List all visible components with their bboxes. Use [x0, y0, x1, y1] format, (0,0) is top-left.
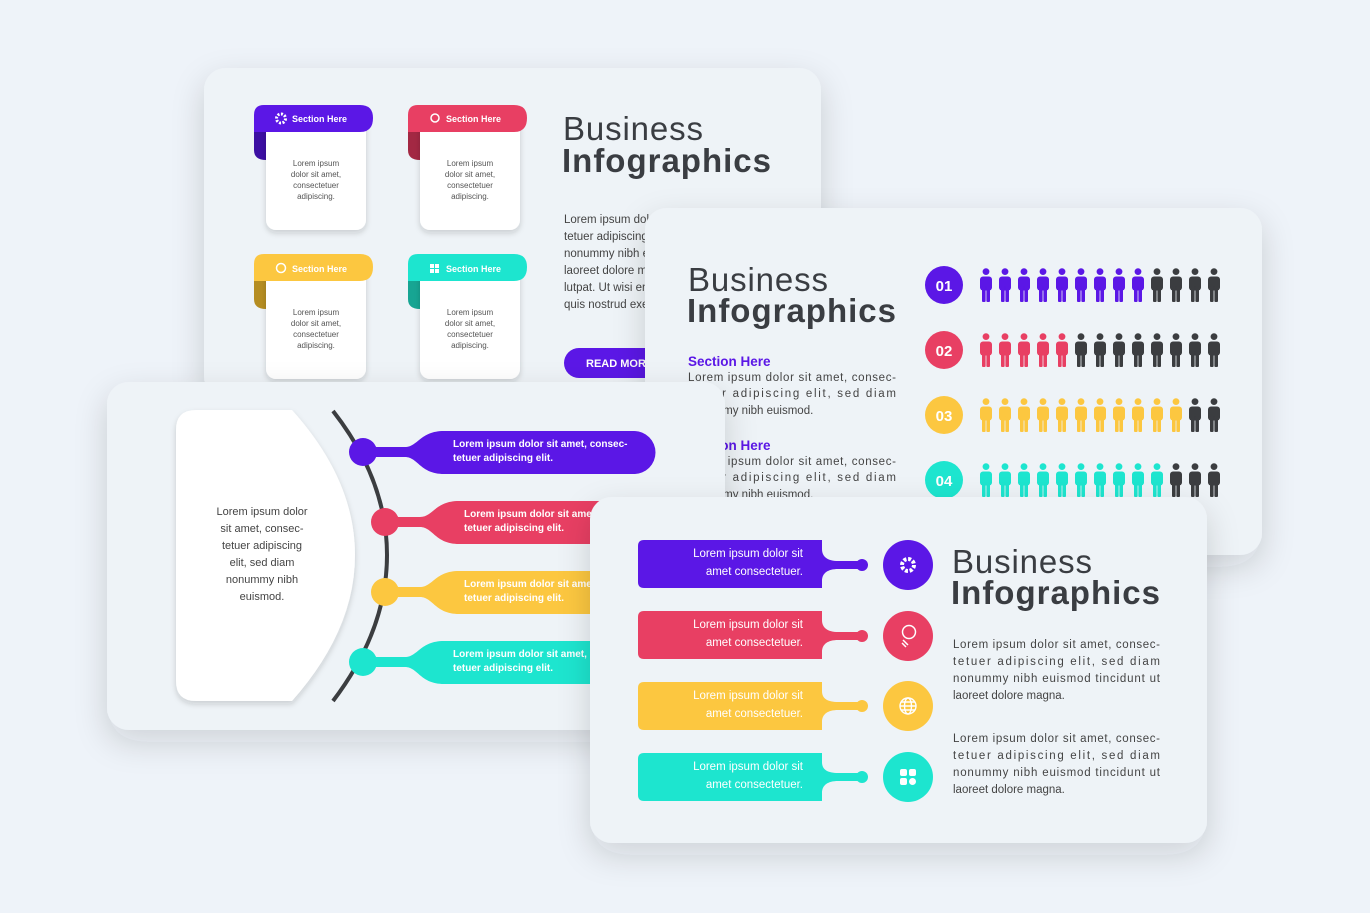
- body text A: nonummy nibh euismod tincidunt ut: [564, 248, 746, 260]
- section text 2: tetuer adipiscing elit, sed diam: [688, 472, 896, 484]
- bar: purple: Lorem ipsum dolor sit: [693, 548, 804, 560]
- row 01: [925, 266, 1220, 304]
- item: teal: [349, 641, 660, 684]
- white arc text block: nonummy nibh: [226, 574, 298, 586]
- row 04: 04: [936, 473, 953, 490]
- white arc text block: Lorem ipsum dolor: [216, 506, 308, 518]
- row 03: 03: [936, 408, 952, 425]
- bar: yellow: [638, 682, 868, 730]
- icon: globe: [883, 681, 933, 731]
- bar: yellow: Lorem ipsum dolor sit: [693, 690, 804, 702]
- card: yellow section: Lorem ipsum: [293, 308, 339, 317]
- section text 1: [688, 354, 896, 417]
- card: yellow section: Section Here: [292, 264, 347, 274]
- white arc text block: elit, sed diam: [230, 557, 294, 569]
- card: red section: consectetuer: [447, 181, 493, 190]
- white arc text block: sit amet, consec-: [220, 523, 304, 535]
- row 02: 02: [936, 343, 952, 360]
- section text 2: nonummy nibh euismod.: [688, 489, 813, 501]
- section text 1: nonummy nibh euismod.: [688, 405, 813, 417]
- body text A: laoreet dolore magna aliquam erat vo-: [564, 265, 759, 277]
- item: purple: Lorem ipsum dolor sit amet, consec-: [453, 439, 627, 450]
- body text D: tetuer adipiscing elit, sed diam: [953, 656, 1160, 668]
- section text 1: Section Here: [688, 354, 771, 369]
- card: purple section: adipiscing.: [297, 192, 335, 201]
- body text A: lutpat. Ut wisi enim ad minim veniam,: [564, 282, 754, 294]
- body text D: Lorem ipsum dolor sit amet, consec-: [953, 639, 1160, 651]
- title D: Business: [952, 543, 1092, 580]
- card: yellow section: consectetuer: [293, 330, 339, 339]
- item: purple: tetuer adipiscing elit.: [453, 453, 553, 464]
- row 02: [925, 331, 1220, 369]
- card: red section: adipiscing.: [451, 192, 489, 201]
- card: teal section: [408, 254, 527, 379]
- section text 1: tetuer adipiscing elit, sed diam: [688, 388, 896, 400]
- body text A: Lorem ipsum dolor sit amet, consec-: [564, 214, 750, 226]
- section text 2: [688, 438, 896, 501]
- panel: icon list: [590, 497, 1207, 843]
- bar: red: amet consectetuer.: [706, 637, 803, 649]
- icon: gear: [883, 540, 933, 590]
- item: red: tetuer adipiscing elit.: [464, 523, 564, 534]
- icon: bulb: [883, 611, 933, 661]
- card: teal section: adipiscing.: [451, 341, 489, 350]
- bar: purple: [638, 540, 868, 588]
- panel: icon list: nonummy nibh euismod tincidunt ut: [953, 767, 1161, 779]
- panel: top-left section cards: [204, 68, 821, 398]
- white arc text block: tetuer adipiscing: [222, 540, 302, 552]
- icon: grid: [883, 752, 933, 802]
- bar: red: [638, 611, 868, 659]
- bar: yellow: amet consectetuer.: [706, 708, 803, 720]
- item: yellow: Lorem ipsum dolor sit amet,: [464, 579, 598, 590]
- body text D: laoreet dolore magna.: [953, 690, 1065, 702]
- card: teal section: dolor sit amet,: [445, 319, 495, 328]
- item: teal: tetuer adipiscing elit.: [453, 663, 553, 674]
- panel: people statistics: [645, 208, 1262, 555]
- card: purple section: Lorem ipsum: [293, 159, 339, 168]
- item: yellow: [371, 571, 660, 614]
- bar: red: Lorem ipsum dolor sit: [693, 619, 804, 631]
- panel: icon list: laoreet dolore magna.: [953, 784, 1065, 796]
- panel: icon list: Lorem ipsum dolor sit amet, consec-: [953, 733, 1160, 745]
- card: teal section: Section Here: [446, 264, 501, 274]
- item: purple: [349, 431, 656, 474]
- card: yellow section: adipiscing.: [297, 341, 335, 350]
- white arc text block: [176, 410, 355, 701]
- card: red section: Lorem ipsum: [447, 159, 493, 168]
- bar: teal: amet consectetuer.: [706, 779, 803, 791]
- row 01: 01: [936, 278, 952, 295]
- row 04: [925, 461, 1220, 499]
- card: yellow section: dolor sit amet,: [291, 319, 341, 328]
- title A: Business: [563, 110, 703, 147]
- white arc text block: euismod.: [240, 591, 284, 603]
- title B: Business: [688, 261, 828, 298]
- card: teal section: Lorem ipsum: [447, 308, 493, 317]
- card: purple section: Section Here: [292, 114, 347, 124]
- card: red section: Section Here: [446, 114, 501, 124]
- body text A: tetuer adipiscing elit, sed diam: [564, 231, 719, 243]
- card: purple section: consectetuer: [293, 181, 339, 190]
- row 03: [925, 396, 1220, 434]
- card: purple section: [254, 105, 373, 230]
- section text 1: Lorem ipsum dolor sit amet, consec-: [688, 372, 896, 384]
- section text 2: Section Here: [688, 438, 771, 453]
- body text D: nonummy nibh euismod tincidunt ut: [953, 673, 1161, 685]
- card: yellow section: [254, 254, 373, 379]
- card: red section: dolor sit amet,: [445, 170, 495, 179]
- title B: Infographics: [687, 292, 896, 329]
- bar: teal: [638, 753, 868, 801]
- item: yellow: tetuer adipiscing elit.: [464, 593, 564, 604]
- body text A: quis nostrud exerci tation.: [564, 299, 695, 311]
- card: red section: [408, 105, 527, 230]
- button: read more: READ MORE: [586, 358, 653, 370]
- title D: Infographics: [951, 574, 1160, 611]
- section text 2: Lorem ipsum dolor sit amet, consec-: [688, 456, 896, 468]
- bar: teal: Lorem ipsum dolor sit: [693, 761, 804, 773]
- item: red: [371, 501, 660, 544]
- item: red: Lorem ipsum dolor sit amet,: [464, 509, 598, 520]
- card: purple section: dolor sit amet,: [291, 170, 341, 179]
- item: teal: Lorem ipsum dolor sit amet,: [453, 649, 587, 660]
- button: read more: [564, 348, 714, 378]
- title A: Infographics: [562, 142, 771, 179]
- panel: icon list: tetuer adipiscing elit, sed diam: [953, 750, 1160, 762]
- panel: arc timeline: [107, 382, 725, 730]
- bar: purple: amet consectetuer.: [706, 566, 803, 578]
- card: teal section: consectetuer: [447, 330, 493, 339]
